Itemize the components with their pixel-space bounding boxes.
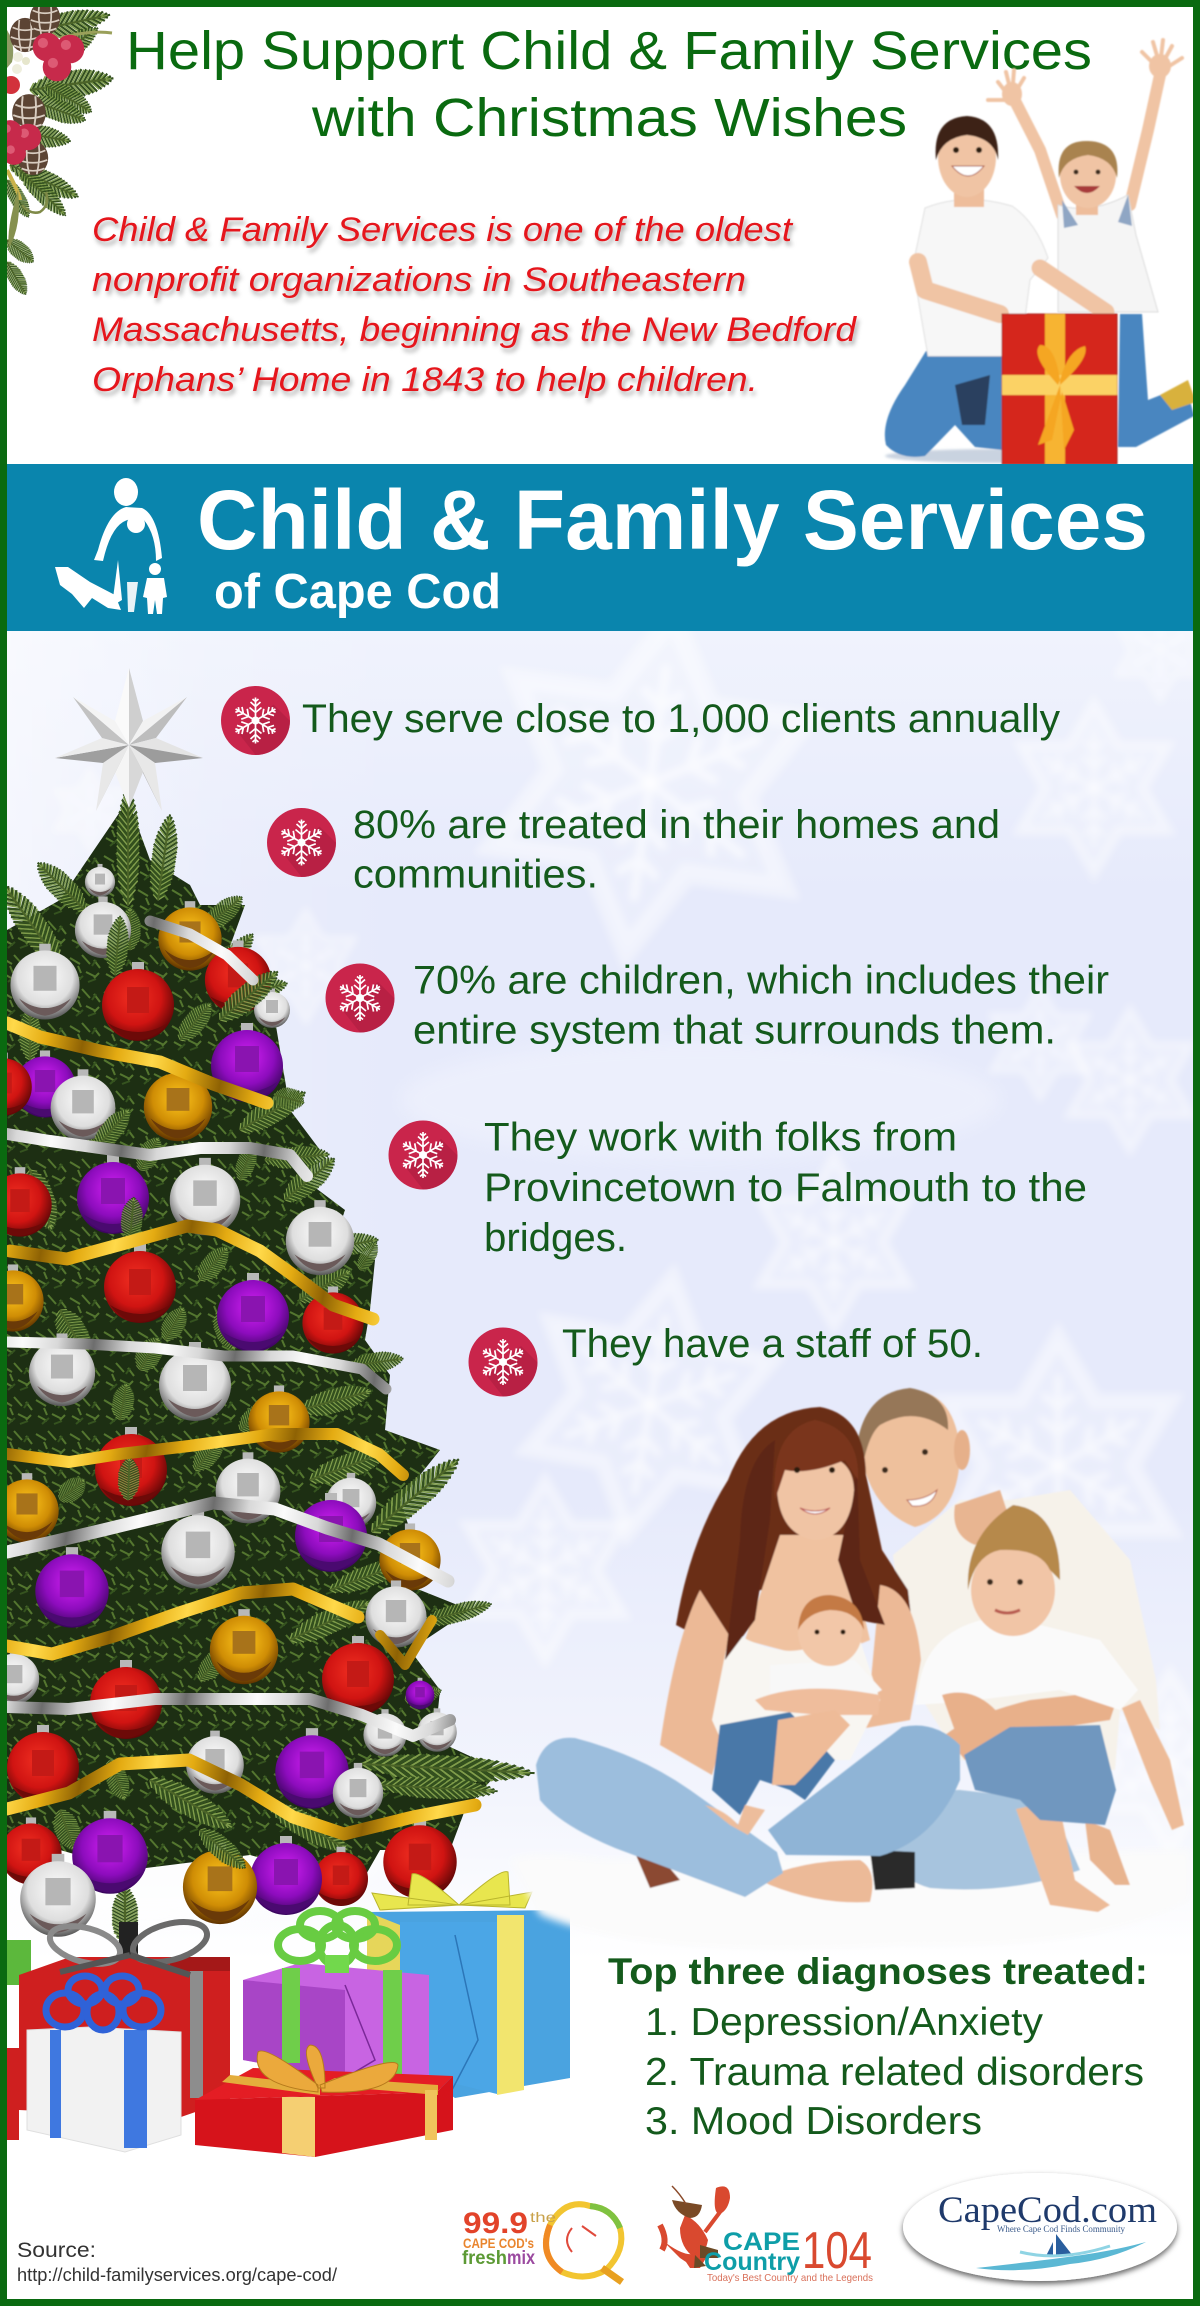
text block: source: http://child-familyservices.org/cape-cod/ (17, 2265, 337, 2285)
stat: service area: Provincetown to Falmouth to the (484, 1166, 1087, 1210)
small red present with gold bow (195, 2045, 453, 2157)
stat: treated in homes (267, 803, 1000, 902)
logo: Cape Country 104: 104 (802, 2222, 872, 2280)
red present with silver bow (19, 1915, 230, 2117)
stat: service area: They work with folks from (484, 1116, 957, 1160)
text block: organization history: Child & Family Services is one of the oldest (92, 211, 794, 249)
panel: organization banner: Child & Family Services (197, 473, 1148, 567)
icon: lobster mascot (660, 2186, 730, 2268)
star (55, 668, 203, 811)
logo: CapeCod.com: Where Cape Cod Finds Community (997, 2224, 1125, 2234)
title: with Christmas Wishes (311, 88, 907, 148)
stat: treated in homes: communities. (353, 852, 598, 896)
stat: staff: They have a staff of 50. (562, 1322, 983, 1366)
logo: 99.9 the Q: CAPE COD's (463, 2235, 534, 2251)
logo: Cape Country 104: Country (704, 2248, 800, 2276)
present (1002, 314, 1117, 464)
logo: 99.9 the Q: 99.9 (463, 2207, 528, 2240)
girl (988, 40, 1196, 447)
blue present (367, 1872, 570, 2098)
stat: staff (468, 1322, 983, 1422)
text block: top three diagnoses: 2. Trauma related disorders (645, 2051, 1144, 2094)
text block: top three diagnoses (608, 1951, 1148, 2143)
stat: treated in homes: 80% are treated in their homes and (353, 803, 1000, 847)
text block: organization history: nonprofit organizations in Southeastern (92, 261, 746, 299)
text block: source (17, 2239, 337, 2285)
logo: Cape Country 104: Today's Best Country and the Legends (707, 2272, 873, 2284)
text block: top three diagnoses: 3. Mood Disorders (645, 2100, 982, 2143)
mother's jeans and feet (536, 1725, 960, 1902)
mother (660, 1407, 921, 1775)
baubles (0, 864, 457, 1937)
icon: pine garland corner decoration (0, 1, 115, 298)
text block: organization history: Massachusetts, beginning as the New Bedford (92, 311, 857, 349)
logo: Cape Country 104 (660, 2186, 873, 2284)
icon: family logo (55, 478, 167, 614)
icon: wrapped presents (7, 1872, 570, 2157)
floor (510, 1850, 1190, 1949)
stat: service area (388, 1116, 1087, 1260)
ribbons (7, 921, 475, 1834)
baby (705, 1595, 882, 1835)
text block: source: Source: (17, 2239, 96, 2262)
panel: snowflake background (0, 594, 1200, 1961)
stat: children share (326, 958, 1109, 1058)
logo: 99.9 the Q: the (530, 2209, 556, 2225)
stat: service area: bridges. (484, 1216, 627, 1260)
tree foliage (0, 786, 535, 1945)
father (857, 1388, 1160, 1890)
logo: 99.9 the Q: fresh (462, 2248, 507, 2269)
purple present (243, 1911, 429, 2078)
text block: organization history (92, 211, 857, 399)
title (126, 21, 1092, 148)
photo: family sitting on the floor (510, 1388, 1190, 1949)
stat: children share: 70% are children, which includes their (413, 958, 1109, 1002)
text block: organization history: Orphans’ Home in 1843 to help children. (92, 361, 758, 399)
logo: CapeCod.com (903, 2173, 1177, 2281)
text block: top three diagnoses: 1. Depression/Anxiety (645, 2001, 1044, 2044)
panel: organization banner (7, 464, 1193, 631)
logo: Cape Country 104: CAPE (723, 2228, 800, 2256)
white present with blue ribbon (27, 1976, 181, 2152)
stat: children share: entire system that surrounds them. (413, 1008, 1056, 1052)
title: Help Support Child & Family Services (126, 21, 1092, 81)
logo: 99.9 the Q (462, 2204, 622, 2282)
text block: top three diagnoses: Top three diagnoses treated: (608, 1951, 1148, 1992)
tree trunk (119, 1922, 138, 1956)
stat: clients served (221, 686, 1060, 780)
panel: organization banner: of Cape Cod (214, 565, 501, 619)
boy (885, 116, 1106, 457)
icon: Christmas tree with baubles (0, 668, 535, 1945)
front branches (87, 915, 383, 1876)
logo: 99.9 the Q: mix (507, 2248, 535, 2269)
photo: two children with a present (885, 40, 1196, 464)
boy with blond hair (915, 1505, 1184, 1912)
logo: CapeCod.com: CapeCod.com (938, 2190, 1157, 2231)
stat: clients served: They serve close to 1,000 clients annually (302, 697, 1060, 741)
